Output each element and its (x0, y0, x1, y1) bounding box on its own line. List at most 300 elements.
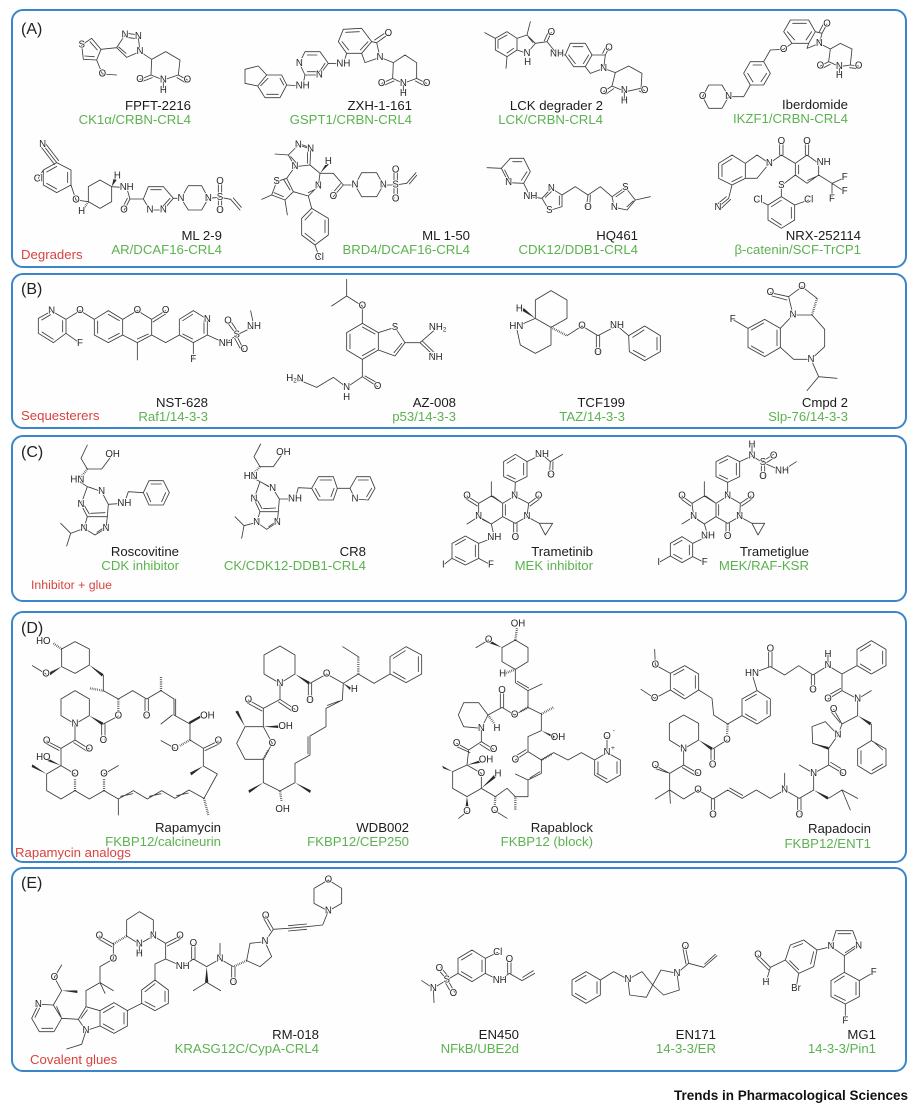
structure: TCF199: O (578, 320, 586, 331)
name: EN171 (676, 1027, 716, 1042)
structure: ZXH-1-161: H (400, 88, 407, 99)
structure: Trametiglue: O (770, 450, 778, 461)
structure: ML 2-9: Cl (34, 173, 43, 184)
structure: ML 2-9: H (78, 206, 85, 217)
target: Raf1/14-3-3 (138, 409, 208, 424)
compound: Rapadocin (641, 641, 886, 851)
structure: RM-018: N (150, 930, 157, 941)
compound: CR8 (224, 444, 375, 573)
structure: WDB002: N (277, 678, 284, 689)
structure: LCK degrader 2: H (621, 95, 628, 106)
target: FKBP12 (block) (501, 834, 593, 849)
structure: EN450: NH (493, 975, 507, 986)
structure: NRX-252114: N (766, 158, 773, 169)
structure: Rapablock: O (491, 805, 499, 816)
structure: RM-018: O (230, 977, 238, 988)
structure: NRX-252114: F (829, 193, 835, 204)
structure: RM-018: O (190, 938, 198, 949)
name: TCF199 (577, 395, 625, 410)
structure: NST-628: N (48, 305, 55, 316)
structure: Rapamycin: O (143, 710, 151, 721)
journal credit: Trends in Pharmacological Sciences (674, 1088, 908, 1103)
name: NRX-252114 (786, 228, 861, 243)
compound: Rapamycin (32, 636, 223, 849)
structure: AZ-008: N (343, 382, 350, 393)
structure: Trametiglue: I (657, 557, 660, 568)
structure: Trametinib: N (511, 490, 518, 501)
structure: NRX-252114: NH (817, 157, 831, 168)
compound: Rapablock (442, 618, 620, 849)
target: FKBP12/CEP250 (307, 834, 409, 849)
structure: ML 1-50: N (380, 179, 387, 190)
compound: NST-628 (38, 305, 261, 424)
structure: NST-628: F (77, 338, 83, 349)
structure: Iberdomide: O (855, 60, 863, 71)
structure: EN171 (572, 941, 717, 1003)
structure: LCK degrader 2: N (621, 85, 628, 96)
structure: NRX-252114: O (803, 136, 811, 147)
structure: NRX-252114: O (778, 136, 786, 147)
structure: ML 1-50 (262, 139, 417, 263)
structure: Iberdomide: O (817, 60, 825, 71)
structure: NRX-252114: Cl (804, 194, 813, 205)
structure: Trametinib: O (463, 490, 471, 501)
structure: ML 1-50: O (392, 164, 400, 175)
structure: AZ-008 (286, 279, 447, 403)
structure: ML 2-9: N (147, 204, 154, 215)
target: FKBP12/ENT1 (784, 836, 871, 851)
structure: ZXH-1-161: O (385, 28, 393, 39)
structure: ZXH-1-161: O (378, 78, 386, 89)
target: 14-3-3/Pin1 (808, 1041, 876, 1056)
structure: ML 2-9: NH (120, 182, 134, 193)
structure: Trametiglue: N (749, 450, 756, 461)
target: MEK inhibitor (515, 558, 594, 573)
structure: Trametinib: N (524, 511, 531, 522)
structure: WDB002: OH (275, 804, 290, 815)
structure: Rapablock: - (613, 728, 615, 735)
structure: AZ-008: H (286, 373, 293, 384)
structure: Rapablock: OH (551, 732, 565, 743)
structure: ZXH-1-161: N (377, 52, 384, 63)
structure: FPFT-2216: N (135, 31, 142, 42)
structure: Rapamycin: O (215, 735, 223, 746)
structure: Rapamycin: O (43, 735, 51, 746)
structure: Roscovitine: N (78, 499, 85, 510)
structure: Rapablock (442, 618, 620, 818)
structure: ML 1-50: S (392, 179, 399, 190)
compound: ML 2-9 (34, 139, 241, 257)
structure: Iberdomide: O (780, 44, 788, 55)
structure: Roscovitine: N (98, 486, 105, 497)
target: FKBP12/calcineurin (105, 834, 221, 849)
name: FPFT-2216 (125, 98, 191, 113)
heading: panel E: (E) (21, 875, 42, 892)
structure: AZ-008: S (392, 322, 398, 333)
structure: Rapadocin: O (652, 659, 660, 670)
structure: Rapablock: OH (511, 618, 525, 629)
compound: Iberdomide (699, 18, 863, 126)
structure: Trametinib: I (442, 559, 445, 570)
structure: LCK degrader 2 (485, 22, 649, 106)
structure: WDB002 (235, 646, 422, 815)
compound: NRX-252114 (715, 136, 861, 257)
name: Roscovitine (111, 544, 179, 559)
compound: TCF199 (509, 291, 660, 424)
structure: Trametiglue: O (759, 471, 767, 482)
structure: RM-018: NH (176, 961, 190, 972)
structure: ML 1-50: H (325, 156, 332, 167)
structure: ZXH-1-161: O (423, 78, 431, 89)
target: Slp-76/14-3-3 (768, 409, 848, 424)
compound: Trametiglue (657, 439, 809, 573)
structure: Rapadocin: O (694, 784, 702, 795)
structure: NST-628: O (224, 315, 232, 326)
structure: Iberdomide (699, 18, 863, 108)
structure: Rapablock: O (463, 806, 471, 817)
category label: Rapamycin analogs: Rapamycin analogs (15, 845, 131, 860)
structure: Rapamycin: O (100, 735, 108, 746)
structure: Trametinib: O (535, 490, 543, 501)
structure: AZ-008: N (297, 373, 304, 384)
structure: CR8: N (274, 517, 281, 528)
structure: MG1: H (763, 977, 770, 988)
structure: EN450: O (506, 954, 514, 965)
structure: Rapadocin: O (830, 704, 838, 715)
structure: HQ461: S (546, 205, 553, 216)
structure: Rapablock: O (490, 744, 498, 755)
structure: Rapadocin: O (767, 643, 775, 654)
target: KRASG12C/CypA-CRL4 (175, 1041, 319, 1056)
structure: WDB002: H (351, 684, 358, 695)
structure: Cmpd 2: O (767, 287, 775, 298)
structure: Rapablock: N (604, 747, 611, 758)
name: MG1 (847, 1027, 876, 1042)
target: AR/DCAF16-CRL4 (111, 242, 222, 257)
structure: LCK degrader 2: O (605, 42, 613, 53)
structure: RM-018: O (176, 930, 184, 941)
structure: TCF199: H (516, 303, 523, 314)
target: BRD4/DCAF16-CRL4 (342, 242, 470, 257)
structure: ML 1-50: N (295, 139, 302, 150)
structure: NST-628: S (233, 329, 240, 340)
name: HQ461 (596, 228, 638, 243)
structure: TCF199: O (594, 347, 602, 358)
compound: Cmpd 2 (730, 281, 848, 424)
structure: CR8: NH (288, 493, 302, 504)
structure: Iberdomide: N (836, 61, 843, 72)
structure: LCK degrader 2: O (600, 86, 608, 97)
structure: Iberdomide: O (823, 18, 831, 29)
compound: EN171 (572, 941, 717, 1056)
structure: EN450: N (430, 983, 437, 994)
structure: WDB002: O (306, 695, 314, 706)
structure: Rapadocin: N (680, 743, 687, 754)
structure: CR8: HN (244, 471, 258, 482)
structure: Trametiglue (657, 439, 796, 568)
structure: MG1: O (754, 949, 762, 960)
structure: Rapablock: O (485, 634, 493, 645)
structure: Trametiglue: N (724, 490, 731, 501)
category label: Covalent glues: Covalent glues (30, 1052, 118, 1067)
structure: AZ-008: NH (429, 352, 443, 363)
structure: Rapadocin: O (824, 693, 832, 704)
structure: Rapamycin (32, 636, 223, 815)
structure: Rapadocin: O (652, 760, 660, 771)
structure: CR8: OH (276, 447, 291, 458)
structure: Iberdomide: N (725, 91, 732, 102)
structure: LCK degrader 2: N (524, 48, 531, 59)
structure: Cmpd 2 (730, 281, 837, 391)
structure: ML 1-50: N (315, 180, 322, 191)
structure: AZ-008: O (359, 300, 367, 311)
compound: FPFT-2216 (78, 29, 192, 127)
structure: FPFT-2216: O (99, 68, 107, 79)
structure: Iberdomide: N (816, 38, 823, 49)
name: Trametinib (531, 544, 593, 559)
structure: ZXH-1-161 (245, 28, 431, 99)
structure: Roscovitine: NH (117, 498, 131, 509)
structure: RM-018: O (262, 910, 270, 921)
structure: ML 2-9: S (217, 192, 223, 203)
target: 14-3-3/ER (656, 1041, 716, 1056)
name: Rapamycin (155, 820, 221, 835)
structure: MG1: N (828, 941, 835, 952)
name: ML 2-9 (181, 228, 222, 243)
structure: NRX-252114: F (842, 186, 848, 197)
structure: Rapadocin: O (796, 809, 804, 820)
name: ZXH-1-161 (348, 98, 412, 113)
structure: RM-018: N (325, 905, 332, 916)
structure: ML 2-9: O (72, 194, 80, 205)
structure: ML 2-9: O (216, 176, 224, 187)
structure: HQ461 (487, 158, 650, 216)
structure: EN171: N (674, 968, 681, 979)
structure: HQ461: NH (523, 191, 537, 202)
target: IKZF1/CRBN-CRL4 (733, 111, 848, 126)
structure: Rapadocin: H (825, 649, 832, 660)
structure: Trametiglue: N (736, 511, 743, 522)
structure: NST-628: N (204, 314, 211, 325)
structure: RM-018: N (262, 936, 269, 947)
structure: Rapamycin: HO (36, 752, 51, 763)
structure: FPFT-2216: O (184, 74, 192, 85)
structure: FPFT-2216: S (78, 39, 85, 50)
structure: Rapadocin: O (839, 768, 847, 779)
structure: MG1: Br (791, 983, 802, 994)
structure: WDB002: O (269, 738, 277, 749)
structure: AZ-008: 2 (443, 326, 447, 333)
name: Cmpd 2 (802, 395, 848, 410)
structure: TCF199: NH (610, 320, 624, 331)
structure: NST-628: NH (219, 338, 233, 349)
structure: Trametiglue: F (702, 557, 708, 568)
target: MEK/RAF-KSR (719, 558, 809, 573)
compound: AZ-008 (286, 279, 456, 424)
structure: RM-018: O (51, 972, 59, 983)
compound: WDB002 (235, 646, 422, 849)
structure: Rapamycin: O (71, 768, 79, 779)
structure: NST-628: O (134, 305, 142, 316)
target: β-catenin/SCF-TrCP1 (734, 242, 861, 257)
structure: ZXH-1-161: NH (336, 58, 350, 69)
structure: RM-018: N (217, 953, 224, 964)
structure: Rapablock: + (611, 745, 615, 752)
structure: RM-018: O (325, 874, 333, 885)
target: NFkB/UBE2d (441, 1041, 519, 1056)
structure: Rapablock: N (478, 723, 485, 734)
structure: EN450: O (436, 963, 444, 974)
structure: Rapablock: O (603, 731, 611, 742)
target: CDK12/DDB1-CRL4 (519, 242, 638, 257)
structure: ML 2-9: N (160, 204, 167, 215)
structure: MG1 (754, 931, 877, 1026)
structure: Trametiglue: NH (701, 530, 715, 541)
structure: TCF199: HN (509, 321, 523, 332)
structure: LCK degrader 2: H (524, 57, 531, 68)
structure: RM-018: N (83, 1025, 90, 1036)
structure: AZ-008: 2 (293, 377, 297, 384)
structure: ML 2-9: H (114, 170, 121, 181)
structure: LCK degrader 2: NH (550, 48, 564, 59)
structure: CR8: N (253, 517, 260, 528)
structure: Rapablock: O (478, 768, 486, 779)
structure: NST-628: O (162, 305, 170, 316)
structure: Rapablock: O (453, 738, 461, 749)
structure: Trametiglue: NH (775, 465, 789, 476)
structure: Rapamycin: O (86, 743, 94, 754)
structure: MG1: N (855, 940, 862, 951)
name: AZ-008 (413, 395, 456, 410)
structure: Cmpd 2: F (730, 314, 736, 325)
structure: Roscovitine: N (103, 523, 110, 534)
structure: Cmpd 2: N (790, 309, 797, 320)
structure: FPFT-2216 (78, 29, 192, 96)
structure: Trametiglue: O (724, 531, 732, 542)
structure: Trametiglue: O (747, 490, 755, 501)
panel: D rapamycin analogs (12, 612, 906, 862)
structure: Roscovitine: HN (70, 474, 84, 485)
structure: Cmpd 2: N (808, 354, 815, 365)
structure: WDB002: O (291, 704, 299, 715)
structure: NRX-252114: Cl (753, 194, 763, 205)
structure: NRX-252114: F (842, 172, 848, 183)
heading: panel B: (B) (21, 281, 42, 298)
structure: RM-018: N (35, 999, 42, 1010)
structure: ML 1-50: N (307, 143, 314, 154)
compound: ML 1-50 (262, 139, 470, 263)
category label: Inhibitor + glue: Inhibitor + glue (31, 578, 112, 592)
structure: TCF199 (509, 291, 660, 361)
structure: Roscovitine: N (81, 523, 88, 534)
name: Rapablock (531, 820, 593, 835)
structure: Trametinib: F (488, 559, 494, 570)
structure: RM-018 (32, 874, 342, 1049)
structure: ML 1-50: S (273, 176, 280, 187)
structure: ML 2-9: N (205, 193, 212, 204)
structure: Rapablock: O (512, 754, 520, 765)
structure: Rapablock: H (499, 668, 506, 679)
structure: ZXH-1-161: NH (296, 80, 310, 91)
structure: WDB002: O (323, 668, 331, 679)
structure: Roscovitine: OH (105, 449, 120, 460)
target: GSPT1/CRBN-CRL4 (290, 112, 412, 127)
structure: Rapadocin: O (651, 693, 659, 704)
structure: RM-018: H (136, 948, 143, 959)
compound: EN450 (422, 947, 535, 1056)
structure: Rapablock: O (498, 685, 506, 696)
structure: MG1: F (842, 1015, 848, 1026)
compound: MG1 (754, 931, 877, 1056)
structure: Trametiglue: N (690, 511, 697, 522)
structure: EN450: S (443, 974, 450, 985)
structure: Rapadocin: N (810, 768, 817, 779)
structure: HQ461: S (622, 182, 629, 193)
structure: EN450 (422, 947, 535, 1003)
structure: Rapamycin: N (72, 718, 79, 729)
name: Trametiglue (740, 544, 809, 559)
category label: Degraders: Degraders (21, 247, 83, 262)
target: LCK/CRBN-CRL4 (498, 112, 603, 127)
structure: ML 2-9: O (120, 204, 128, 215)
structure: FPFT-2216: N (137, 46, 144, 57)
structure: Rapamycin: O (115, 710, 123, 721)
structure: Trametinib: NH (535, 449, 549, 460)
structure: AZ-008: H (343, 392, 350, 403)
name: NST-628 (156, 395, 208, 410)
compound: Roscovitine (61, 445, 180, 573)
structure: ML 1-50: O (392, 193, 400, 204)
structure: Rapablock: H (495, 768, 502, 779)
structure: Rapadocin: O (709, 759, 717, 770)
structure: Iberdomide: O (699, 91, 707, 102)
compound: ZXH-1-161 (245, 28, 431, 127)
compound: Trametinib (442, 449, 594, 573)
structure: ZXH-1-161: N (316, 69, 323, 80)
structure: Rapadocin: N (781, 784, 788, 795)
structure: Trametiglue: S (760, 457, 766, 468)
structure: Trametiglue: O (678, 490, 686, 501)
structure: NST-628: O (76, 305, 84, 316)
structure: EN171: N (625, 974, 632, 985)
structure: FPFT-2216: N (122, 29, 129, 40)
structure: WDB002: O (245, 694, 253, 705)
structure: CR8 (235, 444, 375, 538)
structure: FPFT-2216: N (160, 74, 167, 85)
panel: B sequesterers (12, 274, 906, 428)
structure: NST-628: NH (247, 321, 261, 332)
structure: AZ-008: O (374, 381, 382, 392)
structure: NRX-252114 (715, 136, 848, 228)
panel: C inhibitor + glue (12, 436, 906, 601)
structure: Rapadocin: N (854, 693, 861, 704)
structure: Rapablock: H (494, 723, 501, 734)
name: Rapadocin (808, 821, 871, 836)
structure: NRX-252114: S (778, 180, 785, 191)
structure: EN450: Cl (493, 947, 502, 958)
target: TAZ/14-3-3 (559, 409, 625, 424)
structure: CR8: N (352, 493, 359, 504)
structure: HQ461: N (611, 202, 618, 213)
structure: NST-628 (38, 305, 261, 365)
target: p53/14-3-3 (392, 409, 456, 424)
structure: ZXH-1-161: N (400, 78, 407, 89)
structure: Rapadocin (641, 641, 886, 820)
structure: EN450: O (450, 988, 458, 999)
structure: Trametinib (442, 449, 563, 570)
structure: LCK degrader 2: O (641, 85, 649, 96)
structure: NST-628: O (241, 344, 249, 355)
